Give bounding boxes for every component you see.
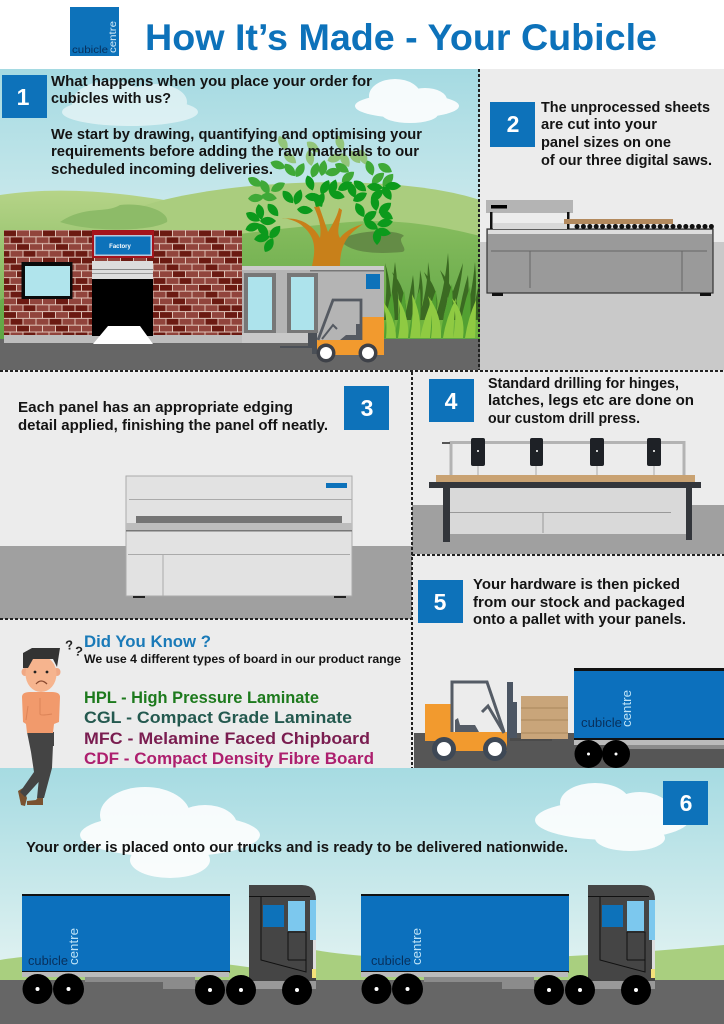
clouds — [80, 783, 689, 878]
truck 2: centre — [409, 928, 424, 965]
tree — [244, 134, 401, 266]
truck 2 — [361, 885, 655, 1005]
truck 2: cubicle — [371, 953, 411, 968]
factory sign — [92, 230, 154, 258]
board types: MFC - Melamine Faced Chipboard — [84, 729, 370, 748]
badge 2: 2 — [507, 111, 519, 137]
badge 3 — [344, 386, 389, 430]
panel: did you know — [0, 620, 412, 768]
canopy lower — [244, 174, 401, 254]
grass — [382, 253, 480, 338]
text: step 1: cubicles with us? — [51, 90, 171, 107]
trailer: cubicle — [581, 715, 622, 730]
truck 1 — [22, 885, 316, 1005]
question marks: ? — [64, 637, 74, 653]
heading: Did You Know ? — [84, 632, 211, 651]
badge 6: 6 — [680, 790, 692, 816]
badge 5: 5 — [434, 589, 447, 615]
hills — [0, 945, 724, 980]
text: step 4: our custom drill press. — [488, 410, 640, 427]
annex building — [242, 266, 384, 343]
panel 3: edging — [0, 372, 412, 619]
text: step 3 — [18, 399, 328, 434]
road — [0, 339, 480, 370]
canopy top — [275, 134, 370, 169]
text: step 5: from our stock and packaged — [473, 594, 685, 611]
panel 4: drilling — [412, 372, 724, 555]
panel 1: order — [0, 69, 480, 370]
digital saw — [486, 200, 713, 296]
badge 4: 4 — [445, 388, 458, 414]
factory window — [22, 262, 72, 299]
header — [0, 0, 724, 69]
question marks — [64, 637, 84, 659]
trailer: centre — [619, 690, 634, 727]
panel 6: delivery — [0, 768, 724, 1024]
edge bander — [126, 476, 352, 598]
panel 2: saw — [480, 69, 724, 370]
pallet boxes — [521, 696, 568, 739]
truck 1: cubicle — [28, 953, 68, 968]
text: step 4 — [488, 375, 694, 427]
text: step 1: requirements before adding the raw materials to our — [51, 143, 419, 160]
truck 1: centre — [66, 928, 81, 965]
text: step 2: are cut into your — [541, 116, 657, 133]
text: step 4: latches, legs etc are done on — [488, 392, 694, 409]
text: step 4: Standard drilling for hinges, — [488, 375, 679, 392]
badge 1 — [2, 75, 47, 118]
factory door — [92, 261, 153, 344]
text: step 3: Each panel has an appropriate edging — [18, 399, 293, 416]
text: step 1 — [51, 73, 422, 178]
text: step 6: Your order is placed onto our trucks and is ready to be delivered nationwide. — [26, 839, 568, 856]
text: step 1: What happens when you place your order for — [51, 73, 372, 90]
hills — [0, 182, 480, 340]
logo — [70, 7, 119, 56]
question marks: ? — [73, 643, 84, 659]
badge 1: 1 — [17, 84, 30, 110]
text: step 5: Your hardware is then picked — [473, 576, 680, 593]
shirt — [22, 692, 60, 733]
badge 4 — [429, 379, 474, 422]
text: step 1: We start by drawing, quantifying and optimising your — [51, 126, 422, 143]
trailer — [574, 668, 724, 768]
text: step 2: panel sizes on one — [541, 134, 671, 151]
board types: CDF - Compact Density Fibre Board — [84, 749, 374, 768]
text: step 1: scheduled incoming deliveries. — [51, 161, 273, 178]
text: step 5 — [473, 576, 686, 628]
subheading: We use 4 different types of board in our product range — [84, 652, 401, 666]
panel 5: hardware — [412, 556, 724, 768]
legs — [20, 732, 54, 798]
badge 3: 3 — [361, 395, 373, 421]
board types: HPL - High Pressure Laminate — [84, 688, 319, 707]
board types — [84, 688, 374, 768]
badge 2 — [490, 102, 535, 147]
shoes — [18, 788, 43, 806]
text: step 3: detail applied, finishing the panel off neatly. — [18, 417, 328, 434]
text: step 2: of our three digital saws. — [541, 152, 712, 169]
hair — [23, 648, 60, 668]
head — [22, 668, 28, 676]
text: step 2 — [541, 99, 712, 169]
dashed dividers — [0, 69, 724, 768]
logo: centre — [107, 21, 119, 53]
title: How It’s Made - Your Cubicle — [145, 17, 657, 58]
text: step 5: onto a pallet with your panels. — [473, 611, 686, 628]
badge 5 — [418, 580, 463, 623]
canopy middle — [246, 158, 396, 203]
factory sign: Factory — [109, 244, 131, 250]
logo: cubicle — [72, 44, 108, 56]
road — [0, 980, 724, 1024]
forklift — [425, 682, 552, 761]
text: step 2: The unprocessed sheets — [541, 99, 710, 116]
clouds — [62, 79, 459, 126]
forklift — [280, 300, 384, 362]
board types: CGL - Compact Grade Laminate — [84, 708, 352, 727]
drill press — [429, 438, 701, 542]
factory — [4, 230, 242, 344]
badge 6 — [663, 781, 708, 825]
character: thinking man — [18, 648, 60, 806]
